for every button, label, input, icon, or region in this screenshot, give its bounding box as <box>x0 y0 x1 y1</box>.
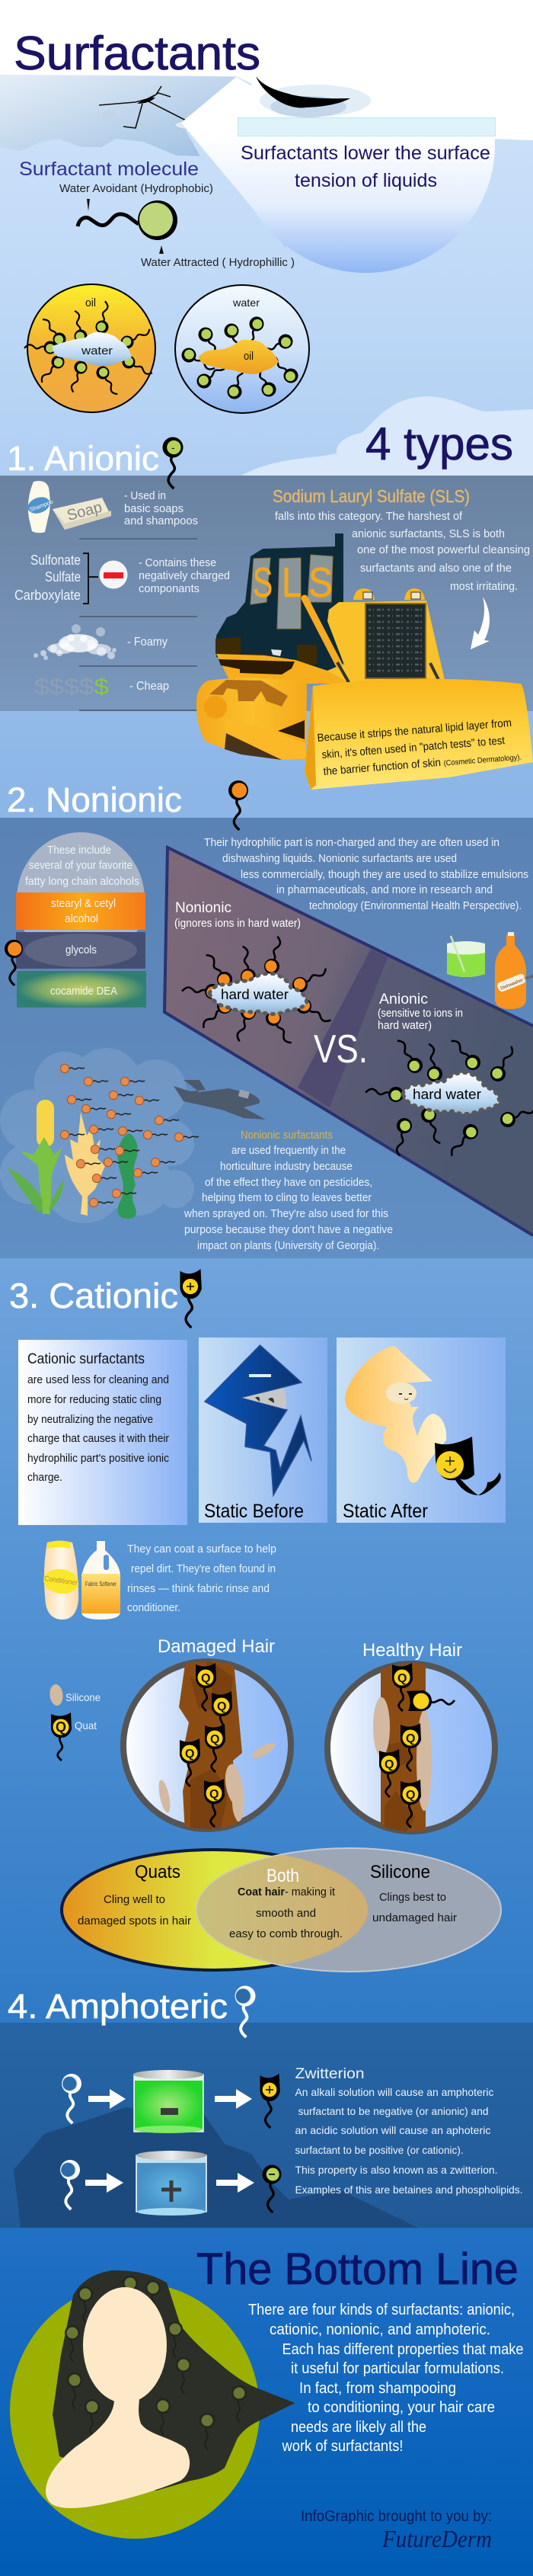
bracket <box>83 553 98 604</box>
icon: calm static wisp <box>345 1346 446 1483</box>
text block: bottom line: it useful for particular formulations. <box>291 2360 504 2377</box>
icon: negative charge <box>99 561 128 588</box>
illustration: green vine <box>117 1133 138 1219</box>
text block: SLS description: most irritating. <box>450 580 518 593</box>
text block: bottom line: work of surfactants! <box>282 2438 404 2455</box>
blade text: the barrier function of skin (Cosmetic Dermatology). <box>323 751 522 778</box>
body underside <box>216 654 350 684</box>
icon: conditioner bottle: Conditioner <box>44 1575 78 1588</box>
arrow <box>215 2089 252 2109</box>
heading: damaged hair: Damaged Hair <box>158 1636 275 1657</box>
text block: horticulture: purpose because they don't have a negative <box>184 1223 393 1236</box>
quats: Q <box>210 1733 219 1746</box>
arrow <box>88 2089 126 2109</box>
arrow: curved down <box>471 597 490 649</box>
water blob <box>53 332 132 366</box>
panel: versus <box>164 847 533 1235</box>
hair <box>53 2270 295 2491</box>
icon: anionic result <box>262 2164 282 2212</box>
icon: fabric softener jug: Fabric Softener <box>85 1580 116 1588</box>
text block: components: Carboxylate <box>14 588 81 603</box>
text block: horticulture: are used frequently in the <box>231 1144 346 1157</box>
icon: amphoteric surfactant <box>235 1986 256 2037</box>
hood <box>283 601 445 686</box>
text block: surface tension: Surfactants lower the surface <box>241 143 490 164</box>
text block: coat a surface <box>127 1543 276 1614</box>
label: nonionic: Nonionic <box>175 900 231 916</box>
heading: healthy hair: Healthy Hair <box>362 1640 462 1661</box>
hair shaft <box>381 1654 426 1837</box>
text block: surface tension <box>241 143 490 191</box>
legend: silicone <box>49 1684 101 1706</box>
text block: coat a surface: repel dirt. They're often found in <box>131 1562 276 1575</box>
panel: cationic description: are used less for cleaning and <box>27 1373 169 1386</box>
legend: silicone: Silicone <box>65 1691 101 1703</box>
venn diagram: quats vs silicone: Coat hair- making it <box>238 1886 336 1898</box>
silicone patches <box>373 1697 432 1811</box>
blade text <box>317 717 522 778</box>
hard water cloud <box>209 973 307 1014</box>
label: anionic: Anionic <box>379 992 428 1008</box>
title: Surfactants <box>14 27 260 80</box>
icon: anionic surfactant <box>163 437 183 489</box>
legend: quat: Q <box>56 1719 66 1735</box>
background hill <box>14 2107 418 2228</box>
arrow <box>216 2173 254 2193</box>
panel: cationic description: more for reducing static cling <box>27 1393 161 1406</box>
panel: alcohol stack: several of your favorite <box>29 860 132 872</box>
text block: horticulture: of the effect they have on pesticides, <box>205 1176 372 1189</box>
text block: hydrophilic part: dishwashing liquids. Nonionic surfactants are used <box>222 853 457 865</box>
icon: blue beaker <box>136 2151 206 2216</box>
hair shaft <box>179 1654 242 1833</box>
venn diagram: quats vs silicone: Silicone <box>370 1862 430 1882</box>
panel: cationic description: charge that causes it with their <box>27 1432 169 1445</box>
panel: cationic description: charge. <box>27 1471 62 1484</box>
panel: alcohol stack: stearyl & cetyl <box>51 898 116 910</box>
text block: horticulture: helping them to cling to leaves better <box>202 1191 372 1204</box>
illustration: bulldozer <box>196 533 533 790</box>
text block: charged components: negatively charged <box>139 569 230 582</box>
quats <box>379 1663 455 1828</box>
text block: SLS description: one of the most powerful cleansing <box>357 543 530 556</box>
oil blob <box>199 340 279 374</box>
text: foamy: - Foamy <box>127 636 168 649</box>
text block: bottom line: to conditioning, your hair care <box>308 2399 495 2416</box>
icon: dollar signs: $$$$ $ <box>34 674 109 700</box>
text block: hydrophilic part: Their hydrophilic part is non-charged and they are often used in <box>204 837 499 849</box>
text block: SLS description: anionic surfactants, SLS is both <box>352 527 505 540</box>
text block: bottom line: There are four kinds of surfactants: anionic, <box>248 2302 515 2318</box>
quats: Q <box>406 1732 415 1745</box>
text block: zwitterion: an acidic solution will cause an aphoteric <box>295 2124 490 2136</box>
surfactants in hair <box>65 2276 247 2449</box>
icon: foam <box>34 624 116 660</box>
legend: quat: Quat <box>75 1719 97 1732</box>
illustration: spray cloud <box>0 1048 194 1223</box>
heading: surfactant molecule: Surfactant molecule <box>19 159 199 180</box>
diagram: water in oil circle <box>24 284 155 412</box>
diagram: surfactant molecule <box>59 182 295 269</box>
diagram: nonionic in hard water: hard water <box>221 987 289 1002</box>
panel: nonionic <box>0 818 533 1258</box>
wood cutout <box>209 680 288 706</box>
SLS letters: S <box>308 559 333 606</box>
text block: soaps: - Used in <box>124 489 166 502</box>
text block: coat a surface: conditioner. <box>127 1601 180 1614</box>
text block: horticulture: when sprayed on. They're also used for this <box>184 1207 388 1220</box>
text block: soaps <box>124 489 198 527</box>
text block: soaps: basic soaps <box>124 502 184 515</box>
text: VS: VS. <box>314 1027 368 1072</box>
text block: surface tension: tension of liquids <box>295 170 437 191</box>
venn diagram: quats vs silicone: Cling well to <box>104 1893 165 1906</box>
illustration: wheat plant <box>65 1112 105 1216</box>
diagram: damaged hair <box>123 1654 291 1833</box>
text block: components: Sulfonate <box>30 553 81 568</box>
text block: zwitterion <box>295 2066 522 2196</box>
SLS letters <box>253 559 333 606</box>
icon: happy cationic cat <box>435 1437 501 1495</box>
diagram: water in oil circle: water <box>81 344 113 357</box>
panel: water strider <box>0 75 236 156</box>
hard water cloud <box>403 1073 499 1114</box>
diagram: nonionic in hard water <box>182 935 334 1048</box>
white top area <box>0 0 533 140</box>
quats: Q <box>185 1748 194 1761</box>
text block: horticulture: impact on plants (University of Georgia). <box>197 1239 379 1252</box>
diagram: surfactant molecule: Water Avoidant (Hydrophobic) <box>59 182 213 195</box>
icon: anionic surfactant: - <box>171 441 175 453</box>
quats: Q <box>397 1672 407 1685</box>
panel: amphoteric <box>0 2023 533 2228</box>
face and shoulders <box>46 2287 190 2508</box>
panel: alcohol stack: alcohol <box>65 913 98 925</box>
illustration: corn plant <box>7 1100 64 1214</box>
panel: alcohol stack: cocamide DEA <box>50 985 117 998</box>
text block: SLS description: falls into this category. The harshest of <box>275 510 463 523</box>
text block: charged components: componants <box>139 582 199 595</box>
panel: alcohol stack <box>16 832 146 1008</box>
panel: cationic description: Cationic surfactants <box>27 1351 145 1367</box>
icon: fabric softener jug <box>81 1541 120 1620</box>
text block: bottom line <box>248 2302 524 2455</box>
legend: quat <box>51 1713 97 1761</box>
icon: amphoteric marker <box>60 2160 80 2209</box>
panel: magnifier lens <box>181 17 495 273</box>
blade text: Because it strips the natural lipid layer from <box>317 717 512 745</box>
silicone patches <box>157 1740 277 1821</box>
text block: hydrophilic part: in pharmaceuticals, and more in research and <box>276 884 493 896</box>
heading: nonionic: 2. Nonionic <box>7 780 182 819</box>
panel: cationic description: by neutralizing the negative <box>27 1413 153 1426</box>
text block: soaps: and shampoos <box>124 514 198 527</box>
icon: shampoo and soap <box>25 481 111 533</box>
text block: hydrophilic part <box>204 837 528 912</box>
quats: Q <box>385 1758 394 1771</box>
venn diagram: quats vs silicone: Quats <box>135 1862 180 1882</box>
panel: cationic description <box>18 1340 187 1525</box>
label: anionic: hard water) <box>378 1020 432 1032</box>
icon: amphoteric marker <box>62 2074 81 2123</box>
cloud behind 4 types <box>241 396 533 476</box>
text block: zwitterion: Examples of this are betaines and phospholipids. <box>295 2184 522 2196</box>
text block: horticulture: horticulture industry because <box>220 1160 353 1173</box>
text block: bottom line: needs are likely all the <box>291 2419 426 2436</box>
venn diagram: quats vs silicone: Both <box>266 1866 299 1886</box>
text block: components: Sulfate <box>45 569 81 585</box>
panel: anionic <box>0 476 533 711</box>
venn diagram: quats vs silicone: smooth and <box>256 1907 316 1920</box>
text: cheap: - Cheap <box>129 680 169 693</box>
panel: static after: Static After <box>343 1501 428 1522</box>
icon: green beaker <box>133 2070 203 2133</box>
heading: amphoteric: 4. Amphoteric <box>8 1987 228 2026</box>
text block: bottom line: In fact, from shampooing <box>299 2380 456 2397</box>
arrow <box>85 2173 123 2193</box>
text block: SLS description <box>275 510 530 593</box>
text block: zwitterion: This property is also known as a zwitterion. <box>295 2164 498 2176</box>
panel: static before: Static Before <box>204 1501 304 1522</box>
text block: coat a surface: They can coat a surface to help <box>127 1543 276 1556</box>
diagram: oil in water circle: oil <box>244 350 254 363</box>
venn diagram: quats vs silicone: easy to comb through. <box>229 1927 343 1940</box>
text block: zwitterion: An alkali solution will cause an amphoteric <box>295 2086 493 2098</box>
icon: crop duster plane <box>174 1080 266 1120</box>
grille <box>365 604 426 678</box>
icon: conditioner bottle <box>42 1541 80 1620</box>
text block: horticulture: Nonionic surfactants <box>241 1129 333 1142</box>
diagram: healthy hair <box>327 1654 495 1837</box>
text block: bottom line: cationic, nonionic, and amphoteric. <box>270 2321 490 2338</box>
surfactants around water <box>24 300 155 398</box>
text block: zwitterion: surfactant to be negative (or anionic) and <box>298 2105 489 2117</box>
quats: Q <box>201 1672 210 1685</box>
icon: water strider insect <box>99 86 209 130</box>
text block: horticulture <box>184 1129 393 1252</box>
quats: Q <box>406 1789 415 1802</box>
panel: static before <box>199 1338 327 1523</box>
heading: SLS: Sodium Lauryl Sulfate (SLS) <box>273 486 470 506</box>
text block: charged components <box>139 556 230 595</box>
label: nonionic: (ignores ions in hard water) <box>174 918 301 930</box>
row: alkali <box>62 2070 280 2133</box>
heading: the bottom line: The Bottom Line <box>196 2244 519 2294</box>
icon: cationic surfactant <box>180 1269 202 1328</box>
illustration: woman with hair <box>10 2270 295 2539</box>
diagram: anionic in hard water <box>365 1035 533 1160</box>
water band <box>238 117 495 136</box>
row: acid <box>60 2151 282 2216</box>
track <box>196 678 307 760</box>
small surfactants in spray <box>60 1064 199 1207</box>
SLS letters: L <box>282 559 302 606</box>
panel: alcohol stack: fatty long chain alcohols <box>25 876 139 888</box>
diagram: oil in water circle <box>175 285 309 413</box>
lights <box>353 588 425 600</box>
blade text: skin, it's often used in "patch tests" to test <box>321 735 506 761</box>
SLS letters: S <box>253 559 273 606</box>
diagram: oil in water circle: water <box>232 296 260 309</box>
blade <box>305 679 533 790</box>
venn diagram: quats vs silicone: damaged spots in hair <box>78 1914 191 1927</box>
venn diagram: quats vs silicone: undamaged hair <box>372 1911 457 1924</box>
text block: coat a surface: rinses — think fabric rinse and <box>127 1582 270 1595</box>
icon: angry lightning bolt <box>205 1345 311 1495</box>
diagram: anionic in hard water: hard water <box>413 1087 481 1102</box>
venn diagram: quats vs silicone: Clings best to <box>379 1891 446 1904</box>
quats: Q <box>217 1700 226 1713</box>
surfactants around oil <box>179 315 301 401</box>
quats: Q <box>209 1788 219 1801</box>
diagram: water in oil circle: oil <box>85 296 96 309</box>
exhaust <box>335 533 343 606</box>
heading: cationic: 3. Cationic <box>9 1276 178 1315</box>
text block: charged components: - Contains these <box>139 556 216 569</box>
cab windows <box>251 555 333 629</box>
logo: FutureDerm: FutureDerm <box>381 2525 492 2552</box>
panel: alcohol stack: These include <box>47 844 111 857</box>
heading: 4 types: 4 types <box>365 418 513 469</box>
text block: zwitterion: surfactant to be positive (or cationic). <box>295 2144 463 2156</box>
panel: alcohol stack: glycols <box>65 944 97 956</box>
text block: components <box>14 553 81 603</box>
panel: static after <box>337 1338 506 1523</box>
label: nonionic <box>174 900 301 930</box>
quats <box>180 1663 232 1827</box>
label: anionic <box>378 992 463 1032</box>
icon: shampoo and soap: Soap <box>65 499 104 524</box>
label: anionic: (sensitive to ions in <box>378 1008 463 1020</box>
text block: zwitterion: Zwitterion <box>295 2066 364 2082</box>
heading: anionic: 1. Anionic <box>7 439 159 478</box>
panel: cationic description: hydrophilic part's positive ionic <box>27 1452 169 1465</box>
icon: cationic result <box>260 2074 280 2128</box>
icon: insect leg on water <box>256 76 350 107</box>
diagram: surfactant molecule: Water Attracted ( Hydrophillic ) <box>141 256 295 269</box>
icon: nonionic surfactant <box>228 780 248 830</box>
text block: SLS description: surfactants and also one of the <box>360 562 512 575</box>
arm <box>305 598 339 665</box>
cab <box>216 546 344 671</box>
venn diagram: quats vs silicone <box>62 1848 501 1972</box>
credit: InfoGraphic brought to you by: <box>301 2508 492 2525</box>
icon: nonionic marker <box>5 940 23 985</box>
icon: shampoo and soap: Shampoo <box>29 498 54 513</box>
icon: dish soap glass and bottle <box>447 932 533 1009</box>
